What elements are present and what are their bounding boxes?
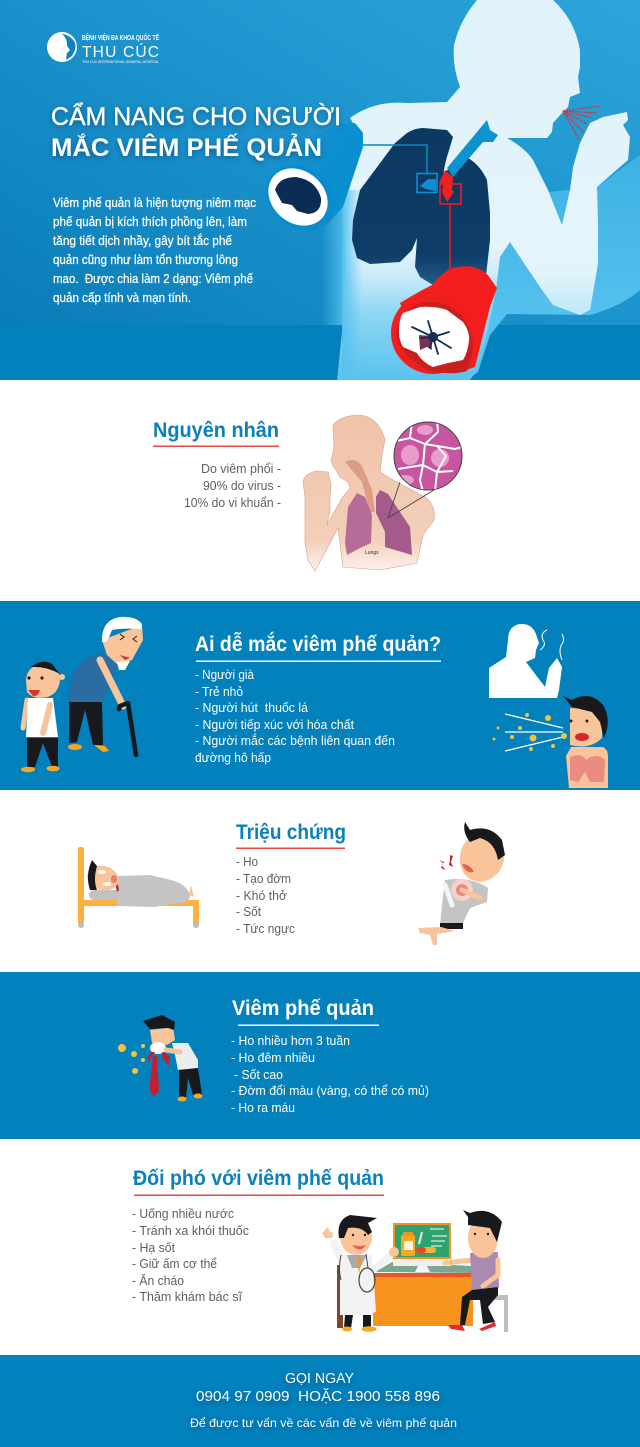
illustration: coughing man with lungs: [303, 415, 462, 571]
panel: Viêm phế quản: [0, 972, 640, 1139]
illustration: child: [21, 662, 65, 772]
illustration: man inhaling pollutants: [492, 696, 608, 788]
cough spray: [563, 106, 601, 139]
logo: THU CÚC: [82, 44, 159, 61]
logo: THU CUC INTERNATIONAL GENERAL HOSPITAL: [82, 60, 159, 64]
panel: hero: [0, 0, 640, 380]
callout box: red: [440, 184, 461, 272]
illustration: smoker silhouette: [489, 624, 564, 698]
heading: Triệu chứng: Triệu chứng: [236, 821, 346, 844]
heading: Nguyên nhân: Nguyên nhân: [153, 419, 279, 442]
trachea: [439, 120, 498, 202]
intro paragraph: mao. Được chia làm 2 dạng: Viêm phế: [53, 272, 253, 286]
risk list: [195, 667, 395, 765]
risk list: - Người tiếp xúc với hóa chất: [195, 717, 354, 732]
panel: call to action footer: [0, 1355, 640, 1447]
signs list: - Sốt cao: [234, 1067, 283, 1082]
coping list: - Tránh xa khói thuốc: [132, 1223, 249, 1238]
back arm silhouette: [470, 155, 640, 378]
panel: Ai dễ mắc viêm phế quản: [0, 601, 640, 790]
signs list: - Ho đêm nhiều: [231, 1050, 315, 1065]
illustration: man coughing blood: [118, 1015, 202, 1102]
symptom list: - Tạo đờm: [236, 871, 291, 886]
call to action text: GỌI NGAY: [285, 1371, 354, 1387]
intro paragraph: tăng tiết dịch nhầy, gây bít tắc phế: [53, 233, 232, 248]
title: MẮC VIÊM PHẾ QUẢN: [51, 132, 322, 162]
logo: [47, 32, 159, 64]
heading: Ai dễ mắc: Ai dễ mắc viêm phế quản?: [195, 632, 441, 656]
coping list: - Thăm khám bác sĩ: [132, 1289, 243, 1304]
coping list: - Uống nhiều nước: [132, 1206, 234, 1221]
symptom list: - Ho: [236, 854, 258, 869]
intro paragraph: [53, 196, 256, 305]
signs list: - Đờm đổi màu (vàng, có thể có mủ): [231, 1083, 429, 1098]
risk list: - Người già: [195, 667, 255, 682]
panel: Nguyên nhân: [153, 414, 462, 572]
causes list: [184, 461, 281, 510]
intro paragraph: quản cũng như làm tổn thương lông: [53, 253, 238, 267]
call to action text: [190, 1371, 457, 1430]
causes list: 90% do virus -: [203, 478, 281, 493]
risk list: - Trẻ nhỏ: [195, 684, 243, 699]
call to action text: Để được tư vấn về các vấn đề về viêm phế quản: [190, 1416, 457, 1430]
causes list: Do viêm phổi -: [201, 461, 281, 476]
illustration: man in bed: [78, 847, 199, 928]
intro paragraph: phế quản bị kích thích phồng lên, làm: [53, 215, 247, 229]
small bronchus cross-section: [266, 123, 363, 231]
risk list: đường hô hấp: [195, 750, 271, 765]
logo: BỆNH VIỆN ĐA KHOA QUỐC TẾ: [82, 32, 159, 42]
intro paragraph: quản cấp tính và mạn tính.: [53, 291, 191, 305]
symptom list: [236, 854, 295, 936]
intro paragraph: Viêm phế quản là hiện tượng niêm mạc: [53, 196, 256, 210]
signs list: [231, 1033, 429, 1115]
coping list: [132, 1206, 249, 1304]
illustration: coughing man with lungs: Lungs: [365, 550, 379, 556]
panel: Triệu chứng: [0, 790, 640, 972]
call to action text: 0904 97 0909 HOẶC 1900 558 896: [196, 1388, 440, 1405]
title: [51, 102, 341, 162]
heading: Viêm phế quản: Viêm phế quản: [232, 997, 374, 1020]
coping list: - Ăn cháo: [132, 1273, 184, 1288]
illustration: old man: [68, 617, 143, 755]
signs list: - Ho ra máu: [231, 1100, 295, 1115]
body silhouette: [337, 0, 630, 380]
risk list: - Người mắc các bệnh liên quan đến: [195, 733, 395, 748]
coping list: - Giữ ấm cơ thể: [132, 1256, 217, 1271]
symptom list: - Tức ngực: [236, 921, 295, 936]
symptom list: - Sốt: [236, 904, 261, 919]
causes list: 10% do vi khuẩn -: [184, 495, 281, 510]
inflamed bronchus cross-section: [391, 266, 497, 374]
illustration: man with chest pain: [418, 822, 511, 945]
callout box: blue: [363, 145, 437, 192]
symptom list: - Khó thở: [236, 888, 287, 903]
panel: Đối phó với viêm phế quản: [0, 1139, 640, 1355]
coping list: - Hạ sốt: [132, 1240, 175, 1255]
illustration: doctor and patient: [322, 1210, 508, 1332]
lungs: [352, 128, 490, 285]
heading: Đối phó: Đối phó với viêm phế quản: [133, 1167, 384, 1190]
title: CẨM NANG CHO NGƯỜI: [51, 102, 341, 131]
risk list: - Người hút thuốc lá: [195, 700, 309, 715]
signs list: - Ho nhiều hơn 3 tuần: [231, 1033, 350, 1048]
